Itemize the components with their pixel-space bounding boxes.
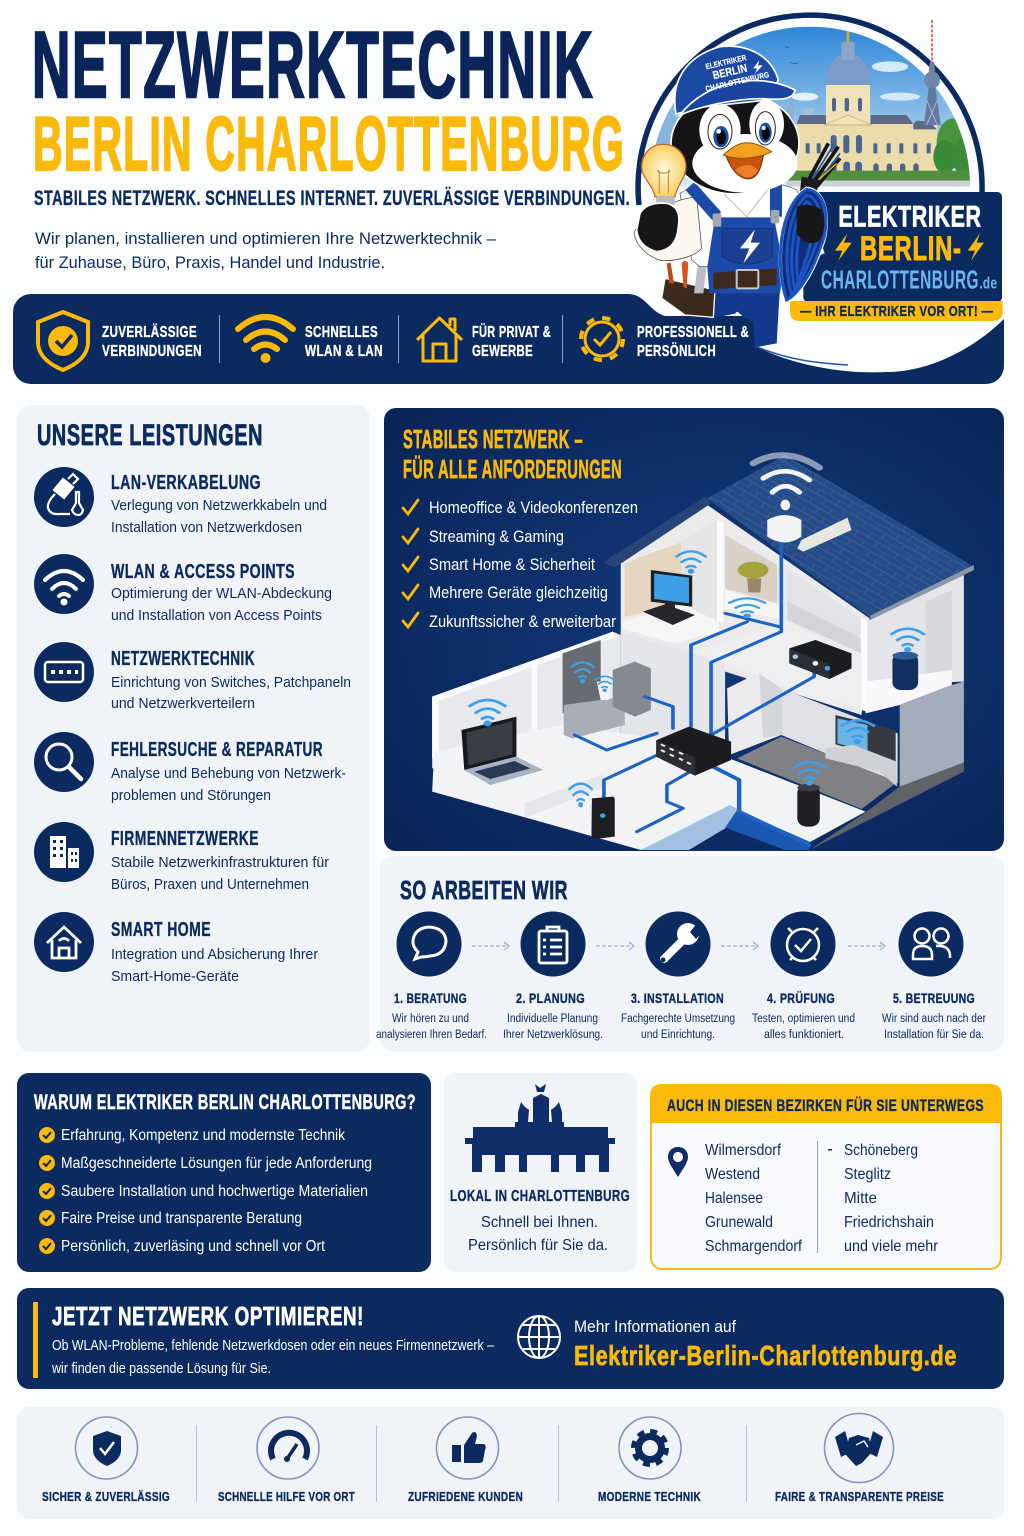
feature: Für Privat und Gewerbe [472,322,551,360]
step labels: 4. PRÜFUNG [767,990,835,1006]
service: Smart Home [34,912,318,985]
tool pouch [662,278,715,317]
bib pocket and bolt [722,228,773,264]
cable coil [780,188,826,302]
circle ring [638,15,982,205]
laptop [461,717,543,785]
main switch [656,727,731,776]
service: Smart Home: Smart-Home-Geräte [111,968,239,985]
panel: process steps [376,856,1004,1052]
right wall [866,575,964,685]
district list right: Schöneberg [844,1142,918,1159]
cta text: wir finden die passende Lösung für Sie. [51,1361,271,1377]
overalls [707,217,783,293]
icon: location pin [668,1147,688,1177]
lower right room [727,673,781,755]
panel: call to action [17,1288,1004,1389]
badge labels: MODERNE TECHNIK [598,1489,701,1504]
icon: thumbs up [452,1432,486,1463]
step circles [396,912,964,976]
heading: Warum: WARUM ELEKTRIKER BERLIN CHARLOTTENBURG? [34,1091,416,1114]
mascot penguin [634,46,840,347]
step descriptions: Individuelle Planung [507,1013,598,1025]
district list right: und viele mehr [844,1238,939,1255]
district list left: Grunewald [705,1214,773,1231]
palace [795,124,938,171]
service: Netzwerktechnik: Einrichtung von Switches, Patchpaneln [111,674,351,691]
icon: gear [634,1432,666,1464]
step labels: 5. BETREUUNG [893,990,975,1006]
local text [468,1214,608,1254]
reasons list: Persönlich, zuverläsing und schnell vor Ort [61,1238,326,1255]
eyes [708,114,732,149]
yellow ribbon [790,301,1003,321]
badge rings [76,1414,894,1482]
cables in hand [807,143,840,187]
district list right: Steglitz [844,1166,891,1183]
service: Firmennetzwerke [34,822,329,893]
badge labels: SCHNELLE HILFE VOR ORT [218,1489,355,1504]
checklist [403,498,638,631]
reasons list: Saubere Installation und hochwertige Materialien [61,1183,368,1200]
district list right [844,1142,939,1255]
feature: Zuverlässige Verbindungen [102,323,202,360]
feature band background [13,286,1005,384]
panel: services [17,405,370,1052]
feature: Professionell und persönlich: PERSÖNLICH [637,341,716,360]
smart speaker blue [892,652,918,690]
router box upper [789,640,852,679]
district list left: Westend [705,1166,760,1183]
service: Fehlersuche und Reparatur: Analyse und Behebung von Netzwerk- [111,765,346,782]
logo text: Berlin: BERLIN- [860,230,962,268]
smartphone [591,797,615,839]
icon: Brandenburg Gate [465,1084,615,1172]
cables [575,543,814,845]
service: Smart Home: Integration und Absicherung Ihrer [111,946,318,963]
step descriptions: Testen, optimieren und [752,1013,855,1025]
reasons list [61,1127,372,1255]
icon: people [913,928,950,959]
service: Firmennetzwerke: Büros, Praxen und Unternehmen [111,876,309,893]
left glove [637,203,679,252]
step labels: 1. BERATUNG [394,990,467,1006]
step descriptions: alles funktioniert. [764,1029,844,1041]
icon: globe [518,1316,560,1358]
feature: Zuverlässige Verbindungen: VERBINDUNGEN [102,343,202,360]
access point on roof [753,455,819,542]
white adapter [597,682,611,700]
cap [675,46,778,114]
heading: Stabiles Netzwerk: FÜR ALLE ANFORDERUNGEN [403,454,622,484]
checklist: Zukunftssicher & erweiterbar [429,612,616,631]
district list left: Wilmersdorf [705,1142,781,1159]
service: Firmennetzwerke: Stabile Netzwerkinfrastrukturen für [111,854,329,871]
step descriptions: Fachgerechte Umsetzung [621,1013,735,1025]
tagline: STABILES NETZWERK. SCHNELLES INTERNET. ZUVERLÄSSIGE VERBINDUNGEN. [34,186,630,210]
house cutaway illustration [432,455,974,850]
check bullets [39,1127,55,1254]
panel: local [444,1073,637,1272]
cap text: BERLIN [712,63,748,82]
legs [709,287,780,347]
cta text: Ob WLAN-Probleme, fehlende Netzwerkdosen oder ein neues Firmennetzwerk – [52,1338,495,1354]
service: Fehlersuche und Reparatur: problemen und Störungen [111,787,271,804]
service: LAN-Verkabelung: LAN-VERKABELUNG [111,472,261,494]
service: Fehlersuche und Reparatur: FEHLERSUCHE & REPARATUR [111,739,323,761]
district list left: Halensee [705,1190,763,1207]
step descriptions: Wir hören zu und [392,1013,469,1025]
service: Netzwerktechnik: NETZWERKTECHNIK [111,648,255,670]
service: WLAN und Access Points: Optimierung der WLAN-Abdeckung [111,585,332,602]
step labels: 2. PLANUNG [516,990,585,1006]
step labels [394,990,975,1006]
feature: Für Privat und Gewerbe: FÜR PRIVAT & [472,322,551,341]
light bulb [642,144,686,197]
panel: why us [17,1073,431,1272]
panel: districts [650,1084,1002,1269]
service: Firmennetzwerke: FIRMENNETZWERKE [111,828,259,850]
reasons list: Erfahrung, Kompetenz und modernste Technik [61,1127,345,1144]
service: LAN-Verkabelung: Installation von Netzwerkdosen [111,519,302,536]
badge labels: ZUFRIEDENE KUNDEN [408,1489,523,1504]
icon: shield check [38,312,88,370]
roof [707,455,974,617]
reasons list: Faire Preise und transparente Beratung [61,1210,302,1227]
cap text: ELEKTRIKER [705,53,747,71]
icon: gear with check [581,318,623,360]
tv lower [825,715,897,787]
step labels: 3. INSTALLATION [631,990,724,1006]
intro text [35,229,497,272]
icon: shield [93,1431,121,1466]
badge labels: SICHER & ZUVERLÄSSIG [42,1489,170,1504]
cta label: Mehr Informationen auf [574,1317,736,1336]
heading: So arbeiten wir: SO ARBEITEN WIR [400,875,568,905]
arrows [472,942,885,950]
icon: clock check [787,928,819,961]
belt [713,268,777,289]
badge labels: FAIRE & TRANSPARENTE PREISE [775,1489,944,1504]
tv tower [924,20,941,125]
upper rear walls [621,503,870,715]
right glove [797,205,824,243]
service: WLAN und Access Points [34,554,332,624]
service: LAN-Verkabelung [34,467,327,536]
service: WLAN und Access Points: WLAN & ACCESS POINTS [111,561,295,583]
icon: handshake [835,1431,883,1466]
icon: speech bubble [413,927,446,959]
feature band items [38,312,749,370]
step descriptions: Ihrer Netzwerklösung. [503,1029,603,1041]
heading: Unsere Leistungen: UNSERE LEISTUNGEN [37,419,263,452]
head [671,93,799,194]
smart speaker black [797,784,820,827]
step descriptions: Wir sind auch nach der [882,1013,986,1025]
ground floor [432,725,866,850]
service: Fehlersuche und Reparatur [34,732,346,804]
feature: Professionell und persönlich: PROFESSIONELL & [637,324,749,341]
scene: Charlottenburg palace [650,27,974,187]
shirt [680,180,825,267]
middle floor slab [689,622,862,707]
grey closet and cabinet [563,640,601,713]
step descriptions: Installation für Sie da. [884,1029,984,1041]
icon: house [417,318,462,361]
checklist: Smart Home & Sicherheit [429,555,595,574]
service: WLAN und Access Points: und Installation von Access Points [111,607,322,624]
feature: Für Privat und Gewerbe: GEWERBE [472,343,533,360]
intro text: Wir planen, installieren und optimieren Ihre Netzwerktechnik – [35,229,497,248]
panel: stable network with house [384,408,1004,851]
heading: Jetzt Netzwerk optimieren: JETZT NETZWERK OPTIMIEREN! [52,1301,364,1331]
checklist: Mehrere Geräte gleichzeitig [429,583,608,602]
icon: clipboard [539,927,567,963]
service: Smart Home: SMART HOME [111,919,211,941]
step descriptions [376,1013,986,1041]
feature: Schnelles WLAN und LAN: SCHNELLES [305,324,378,341]
district list left [705,1142,802,1255]
checklist: Homeoffice & Videokonferenzen [429,498,638,517]
panel: trust badges [17,1407,1004,1519]
local text: Persönlich für Sie da. [468,1237,608,1254]
step descriptions: und Einrichtung. [641,1029,715,1041]
cap text: CHARLOTTENBURG [705,70,770,94]
feature: Schnelles WLAN und LAN: WLAN & LAN [305,343,383,360]
beak [726,156,763,179]
reasons list: Maßgeschneiderte Lösungen für jede Anforderung [61,1155,372,1172]
intro text: für Zuhause, Büro, Praxis, Handel und Industrie. [35,253,385,272]
lower left wing walls [432,632,621,768]
icon: wifi [238,317,293,360]
icon: speedometer [271,1433,307,1462]
local text: Schnell bei Ihnen. [481,1214,598,1231]
monitor and desk [643,570,695,625]
logo box [803,192,1002,302]
step descriptions: analysieren Ihren Bedarf. [376,1029,487,1041]
badge labels [42,1489,944,1504]
cta text [51,1338,495,1377]
service: Netzwerktechnik: und Netzwerkverteilern [111,695,255,712]
feature: Zuverlässige Verbindungen: ZUVERLÄSSIGE [102,323,197,341]
logo text: Charlottenburg.de: .de [979,273,997,292]
bolts [835,233,984,261]
district list right: Mitte [844,1190,877,1207]
title: Netzwerktechnik: NETZWERKTECHNIK [32,12,594,117]
icon: wrench [660,922,702,962]
heading: Stabiles Netzwerk [403,424,622,484]
cap text [700,49,770,94]
district list right: Friedrichshain [844,1214,934,1231]
feature: Schnelles WLAN und LAN [305,324,383,360]
service: LAN-Verkabelung: Verlegung von Netzwerkkabeln und [111,497,327,514]
plant [738,562,768,592]
heading: Lokal in Charlottenburg: LOKAL IN CHARLOTTENBURG [450,1188,630,1205]
feature: Professionell und persönlich [637,324,749,360]
wifi signals [470,551,924,806]
logo badge with mascot [634,15,1003,347]
heading: Stabiles Netzwerk: STABILES NETZWERK – [403,424,583,454]
service: Netzwerktechnik [34,642,351,712]
district list left: Schmargendorf [705,1238,802,1255]
checklist: Streaming & Gaming [429,527,564,546]
